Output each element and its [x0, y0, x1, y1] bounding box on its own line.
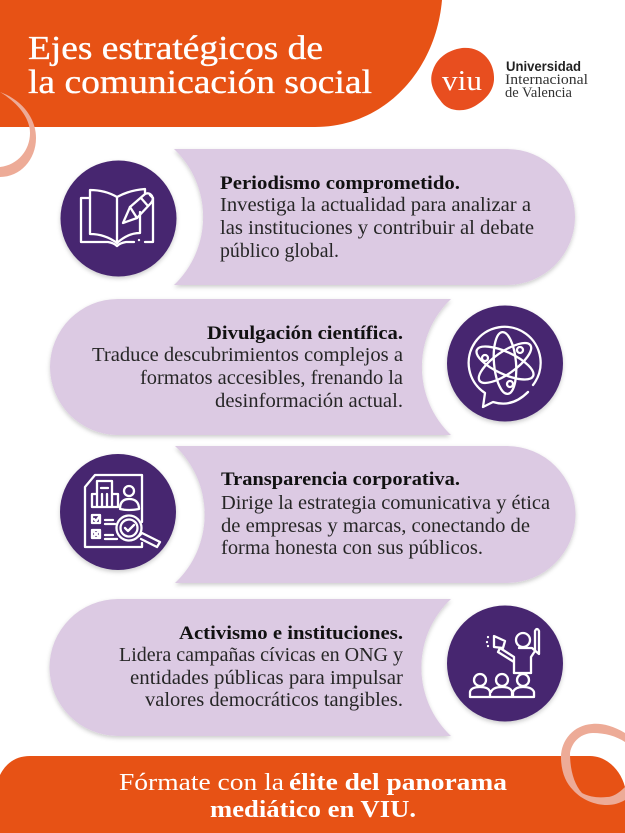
panel 1 text: las instituciones y contribuir al debate	[220, 218, 534, 239]
logo mark text: viu	[442, 65, 482, 97]
footer banner	[0, 756, 625, 833]
footer call to action: élite del panorama	[289, 769, 507, 796]
panel 1 text: Periodismo comprometido.	[220, 174, 460, 194]
panel 4 background	[50, 599, 451, 736]
title	[28, 30, 372, 101]
icon: document with magnifier	[60, 454, 176, 570]
footer call to action: Fórmate con la	[119, 769, 284, 796]
panel 4: activismo e instituciones	[50, 599, 451, 736]
panel 1 text	[220, 174, 534, 262]
header banner	[0, 0, 442, 127]
icon: atom in speech bubble	[447, 306, 563, 422]
panel 2 text: desinformación actual.	[215, 391, 403, 412]
panel 3 text: Dirige la estrategia comunicativa y ética	[221, 493, 550, 514]
panel 3 text: forma honesta con sus públicos.	[221, 538, 483, 559]
panel 1 text: público global.	[220, 241, 339, 262]
logo wordmark: de Valencia	[505, 85, 573, 101]
logo: Universidad Internacional de Valencia	[431, 48, 588, 110]
panel 3 text: Transparencia corporativa.	[221, 470, 460, 490]
panel 2 text	[92, 324, 403, 412]
panel 2 text: Divulgación científica.	[207, 324, 403, 344]
decorative ring bottom right	[561, 724, 625, 805]
panel 4 text: valores democráticos tangibles.	[145, 690, 403, 711]
logo wordmark: Internacional	[505, 72, 588, 88]
panel 3 background	[175, 446, 576, 583]
panel 1: periodismo comprometido	[174, 149, 575, 285]
panel 4 text: entidades públicas para impulsar	[130, 668, 404, 689]
logo wordmark: Universidad	[506, 59, 581, 74]
decorative ring top left	[0, 92, 36, 177]
panel 2 text: Traduce descubrimientos complejos a	[92, 345, 403, 366]
title: Ejes estratégicos de	[28, 30, 323, 67]
panel 1 background	[174, 149, 575, 285]
logo wordmark	[505, 59, 588, 101]
panel 3 text: de empresas y marcas, conectando de	[221, 516, 530, 537]
icon: speaker with megaphone and audience	[447, 606, 563, 722]
panel 4 text: Activismo e instituciones.	[179, 624, 403, 644]
panel 1 text: Investiga la actualidad para analizar a	[220, 195, 531, 216]
logo blob	[431, 48, 494, 110]
panel 3 text	[221, 470, 550, 559]
panel 3: transparencia corporativa	[175, 446, 576, 583]
panel 2 background	[50, 299, 451, 435]
title: la comunicación social	[28, 64, 372, 101]
footer call to action	[119, 769, 507, 823]
panel 4 text: Lidera campañas cívicas en ONG y	[119, 645, 403, 666]
panel 2 text: formatos accesibles, frenando la	[140, 368, 403, 389]
panel 2: divulgación científica	[50, 299, 451, 435]
footer call to action: mediático en VIU.	[210, 796, 416, 823]
panel 4 text	[119, 624, 404, 711]
icon: book and pencil	[60, 160, 176, 276]
